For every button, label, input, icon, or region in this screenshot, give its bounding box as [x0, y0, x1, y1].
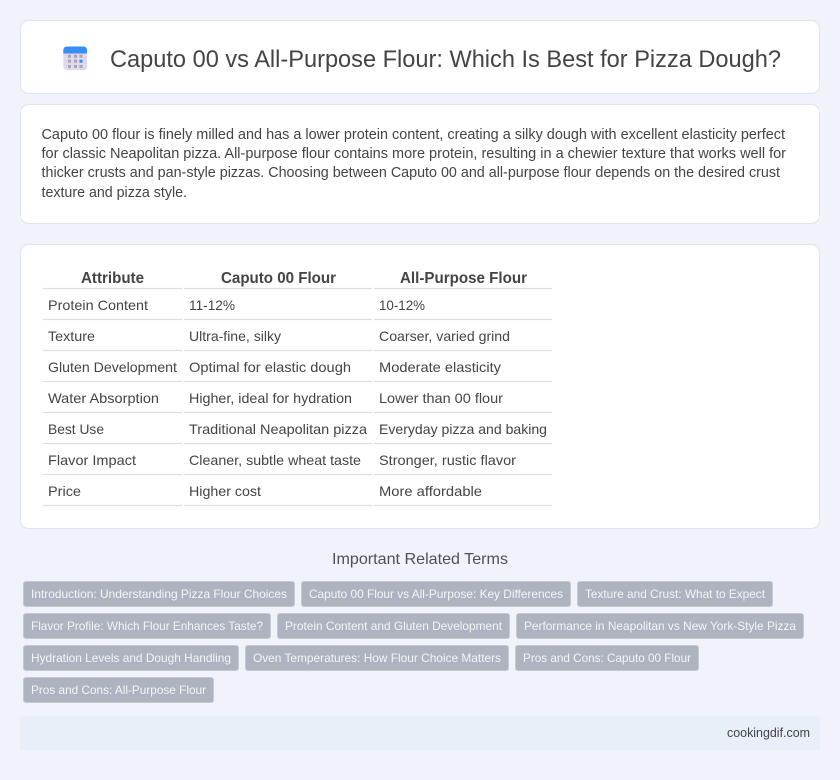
row: price: More affordable [379, 483, 482, 499]
row: gluten development: Optimal for elastic dough [189, 359, 351, 375]
intro paragraph [42, 127, 786, 201]
tag: performance: Performance in Neapolitan vs New York-Style Pizza [524, 619, 796, 633]
panel: header [20, 20, 820, 94]
row: flavor impact: Flavor Impact [48, 452, 136, 468]
row: texture: Coarser, varied grind [379, 328, 510, 344]
intro paragraph: thicker crusts and pan-style pizzas. Choosing between Caputo 00 and all-purpose flour depends on the desired crust [42, 165, 780, 181]
tag: introduction [24, 582, 294, 606]
row: protein content: 10-12% [379, 297, 425, 313]
tag: introduction: Introduction: Understanding Pizza Flour Choices [31, 587, 287, 601]
tag: pros and cons caputo: Pros and Cons: Caputo 00 Flour [523, 651, 691, 665]
row: texture [48, 328, 510, 344]
footer [20, 716, 820, 750]
heading: related terms: Important Related Terms [332, 551, 508, 568]
row: flavor impact: Cleaner, subtle wheat taste [189, 452, 361, 468]
table rule lines [43, 288, 552, 506]
row: protein content: Protein Content [48, 297, 148, 313]
row: best use: Everyday pizza and baking [379, 421, 547, 437]
row: water absorption: Water Absorption [48, 390, 159, 406]
row: water absorption [48, 390, 503, 406]
tag: protein content [278, 614, 510, 638]
table header row: Attribute [81, 270, 144, 287]
row: gluten development: Moderate elasticity [379, 359, 501, 375]
tag: flavor profile [24, 614, 270, 638]
tag: pros and cons caputo [516, 646, 698, 670]
tag: key differences: Caputo 00 Flour vs All-Purpose: Key Differences [309, 587, 563, 601]
tag: pros and cons all-purpose: Pros and Cons: All-Purpose Flour [31, 683, 206, 697]
row: best use: Best Use [48, 421, 104, 437]
tag: performance [516, 614, 804, 638]
panel: comparison table [20, 244, 820, 528]
table header row: All-Purpose Flour [400, 270, 527, 287]
table header row: Caputo 00 Flour [221, 270, 336, 287]
panel: introduction [20, 104, 820, 224]
tag: oven temperatures [246, 646, 508, 670]
row: price: Higher cost [189, 483, 261, 499]
row: texture: Ultra-fine, silky [189, 328, 281, 344]
row: flavor impact [48, 452, 516, 468]
row: protein content: 11-12% [189, 297, 235, 313]
icon: calendar [63, 46, 87, 70]
tag: hydration: Hydration Levels and Dough Handling [31, 651, 231, 665]
row: water absorption: Higher, ideal for hydration [189, 390, 352, 406]
row: best use [48, 421, 547, 437]
tag: hydration [24, 646, 238, 670]
tag: protein content: Protein Content and Gluten Development [285, 619, 503, 633]
row: flavor impact: Stronger, rustic flavor [379, 452, 516, 468]
tag: key differences [302, 582, 570, 606]
table header row [81, 270, 527, 287]
row: protein content [48, 297, 425, 313]
tag: texture and crust [578, 582, 772, 606]
tag: oven temperatures: Oven Temperatures: How Flour Choice Matters [253, 651, 501, 665]
tag: pros and cons all-purpose [24, 678, 214, 702]
tag: texture and crust: Texture and Crust: What to Expect [585, 587, 766, 601]
row: gluten development [48, 359, 501, 375]
tag: flavor profile: Flavor Profile: Which Flour Enhances Taste? [31, 619, 263, 633]
row: price [48, 483, 482, 499]
row: price: Price [48, 483, 81, 499]
row: gluten development: Gluten Development [48, 359, 177, 375]
intro paragraph: texture and pizza style. [42, 185, 187, 201]
row: texture: Texture [48, 328, 95, 344]
footer source text: cookingdif.com [727, 726, 810, 740]
title: Caputo 00 vs All-Purpose Flour: Which Is Best for Pizza Dough? [110, 46, 781, 73]
related term tags [24, 582, 804, 702]
intro paragraph: Caputo 00 flour is finely milled and has a lower protein content, creating a silky dough with excellent elasticity perfect [42, 127, 785, 143]
intro paragraph: for classic Neapolitan pizza. All-purpose flour contains more protein, resulting in a chewier texture that works well for [42, 146, 786, 162]
row: water absorption: Lower than 00 flour [379, 390, 503, 406]
row: best use: Traditional Neapolitan pizza [189, 421, 367, 437]
